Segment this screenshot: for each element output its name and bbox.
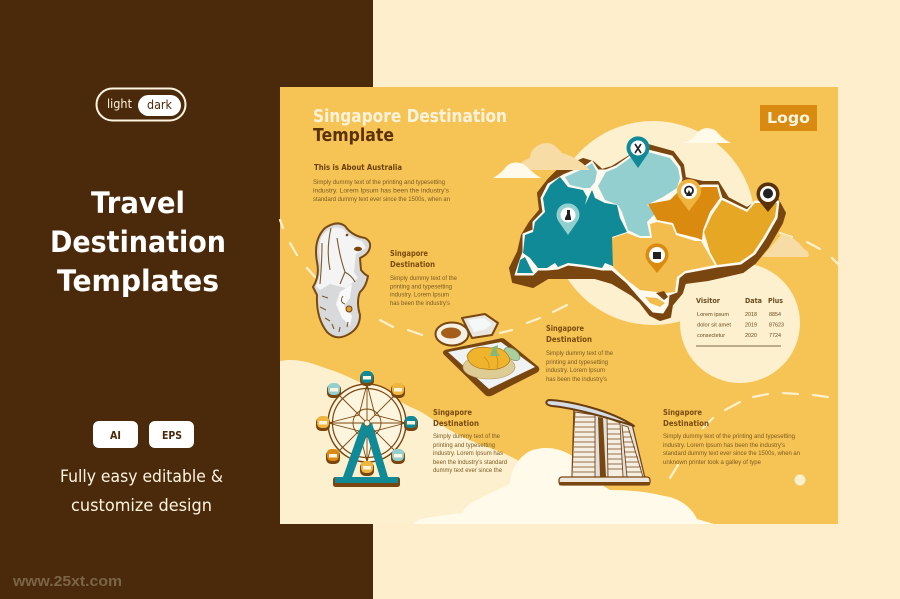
text block: chicken rice: Singapore <box>546 324 584 333</box>
panel: template artboard <box>280 87 839 524</box>
intro text block <box>313 162 451 203</box>
illustration: Marina Bay Sands <box>546 400 650 486</box>
text block: Marina Bay Sands <box>663 408 801 466</box>
intro text block: This is About Australia <box>314 162 402 172</box>
text block: merlion: industry. Lorem Ipsum <box>390 292 449 298</box>
text block: chicken rice: has been the industry's <box>546 376 607 383</box>
toggle: light dark <box>96 88 186 120</box>
data table: 7724 <box>769 333 781 339</box>
background circle: map <box>551 121 755 325</box>
region: north west <box>565 163 597 188</box>
title: Singapore Destination <box>313 107 507 127</box>
text block: merlion: has been the industry's <box>390 300 450 307</box>
region: west <box>517 177 627 273</box>
data table: dolor sit amet <box>697 322 731 328</box>
text block: ferris wheel: Destination <box>433 419 479 428</box>
map of Singapore <box>510 145 785 320</box>
square dish <box>462 314 498 338</box>
tagline <box>60 467 223 515</box>
route dashes <box>280 220 839 478</box>
pin: landmark <box>646 243 668 273</box>
text block: chicken rice: Simply dummy text of the <box>546 350 614 357</box>
watermark: www.25xt.com <box>12 573 122 590</box>
tagline: customize design <box>71 496 212 515</box>
text block: ferris wheel: Simply dummy text of the <box>433 433 501 440</box>
data table: consectetur <box>697 333 725 339</box>
illustration: ferris wheel <box>316 371 418 487</box>
text block: merlion: Simply dummy text of the <box>390 275 458 282</box>
background circle: table <box>680 263 800 383</box>
cloud: white top <box>682 128 731 143</box>
illustration: merlion statue <box>313 223 370 337</box>
text block: ferris wheel <box>433 408 508 474</box>
data table: Plus <box>768 296 783 305</box>
text block: Marina Bay Sands: unknown printer took a galley of type <box>663 459 762 466</box>
background: white cloud <box>413 448 714 524</box>
badge: AI <box>93 421 138 448</box>
data table: 87623 <box>769 322 784 328</box>
badge: EPS <box>149 421 194 448</box>
tagline: Fully easy editable & <box>60 467 223 486</box>
badge: AI: AI <box>110 429 121 442</box>
region: island <box>645 297 665 307</box>
intro text block: standard dummy text ever since the 1500s, when an <box>313 196 451 203</box>
background: cream hill <box>280 360 540 524</box>
data table: 2018 <box>745 312 757 318</box>
logo: Logo <box>767 109 810 127</box>
text block: ferris wheel: industry. Lorem Ipsum has <box>433 450 503 457</box>
map white edge <box>515 150 779 313</box>
intro text block: industry. Lorem Ipsum has been the industry's <box>313 188 449 194</box>
intro text block: Simply dummy text of the printing and typesetting <box>313 179 446 186</box>
text block: chicken rice: industry. Lorem Ipsum <box>546 367 605 374</box>
text block: ferris wheel: been the industry's standard <box>433 459 508 466</box>
logo <box>760 105 817 131</box>
decorative dot <box>794 474 806 486</box>
cloud: peach right <box>762 234 809 257</box>
heading: Travel Destination Templates: Templates <box>57 264 219 298</box>
region: north east <box>648 187 720 240</box>
heading: Travel Destination Templates <box>50 186 226 298</box>
text block: merlion <box>390 249 458 307</box>
text block: Marina Bay Sands: Destination <box>663 419 709 428</box>
text block: merlion: Destination <box>390 260 435 269</box>
panel: left dark sidebar <box>0 0 373 599</box>
toggle: light dark: light <box>107 96 132 111</box>
map notch <box>656 291 668 300</box>
map shadow outline <box>510 145 785 320</box>
text block: ferris wheel: printing and typesetting <box>433 442 496 449</box>
text block: merlion: printing and typesetting <box>390 284 453 290</box>
text block: chicken rice: printing and typesetting <box>546 359 609 366</box>
heading: Travel Destination Templates: Destination <box>50 225 226 259</box>
text block: Marina Bay Sands: Singapore <box>663 408 702 417</box>
sauce bowl <box>436 322 468 346</box>
illustration: chicken rice plate <box>436 314 539 396</box>
badge: EPS: EPS <box>162 429 182 442</box>
title <box>313 107 507 146</box>
pin: food <box>627 136 650 168</box>
data table: 8854 <box>769 312 781 318</box>
data table: Data <box>745 296 762 305</box>
text block: merlion: Singapore <box>390 249 428 258</box>
pin: merlion <box>556 203 580 235</box>
text block: chicken rice: Destination <box>546 335 592 344</box>
text block: Marina Bay Sands: industry. Lorem Ipsum has been the industry's <box>663 442 785 449</box>
cloud: white left <box>493 162 541 178</box>
pin: east <box>756 182 779 212</box>
data table: 2019 <box>745 322 757 328</box>
region: north <box>598 152 680 236</box>
data table: Lorem ipsum <box>697 312 729 318</box>
heading: Travel Destination Templates: Travel <box>91 186 185 220</box>
region: central south <box>612 222 715 293</box>
text block: chicken rice <box>546 324 614 383</box>
region: east <box>704 200 777 265</box>
text block: Marina Bay Sands: standard dummy text ever since the 1500s, when an <box>663 450 801 457</box>
text block: ferris wheel: Singapore <box>433 408 472 417</box>
pin: ferris wheel <box>677 179 701 211</box>
data table: Visitor <box>696 296 720 305</box>
data table <box>696 296 784 346</box>
text block: ferris wheel: dummy text ever since the <box>433 467 503 474</box>
text block: Marina Bay Sands: Simply dummy text of the printing and typesetting <box>663 433 796 440</box>
title: Template <box>313 126 394 146</box>
toggle: light dark: dark <box>147 97 173 112</box>
data table: 2020 <box>745 333 757 339</box>
cloud: peach left <box>518 143 590 170</box>
